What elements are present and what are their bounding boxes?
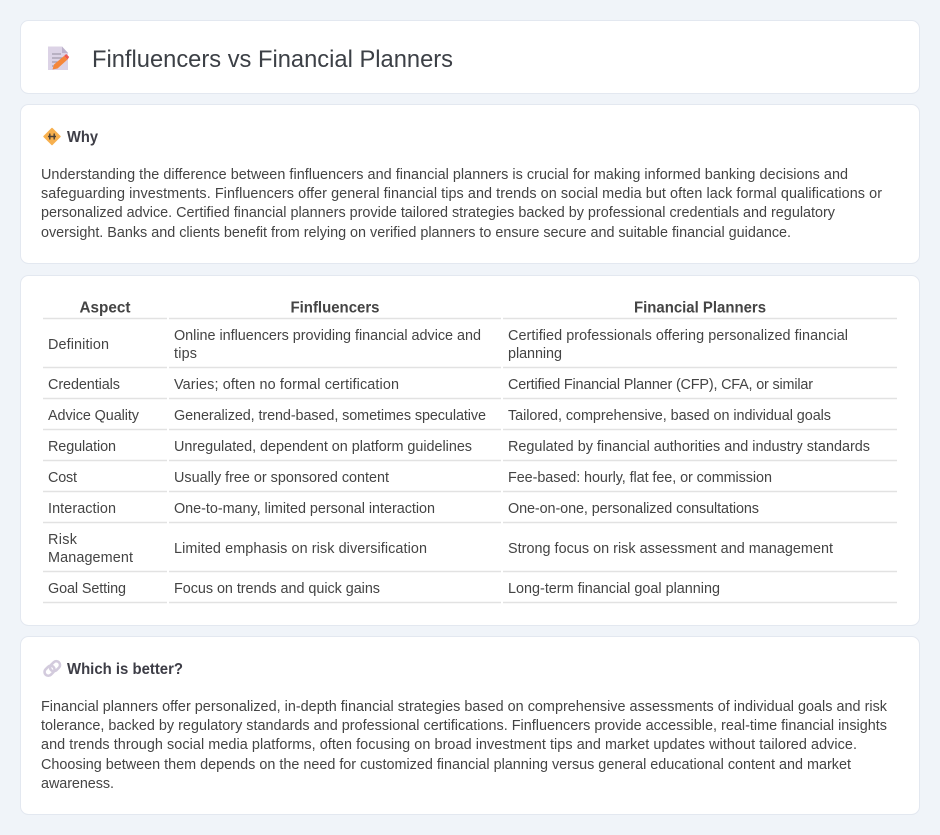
row: cost: Cost	[48, 470, 77, 486]
text block: why: personalized advice. Certified financial planners provide tailored strategies backed by professional credentials and regulatory	[41, 205, 836, 221]
row: advice quality: Tailored, comprehensive, based on individual goals	[508, 408, 831, 424]
icon: chain link	[43, 660, 62, 677]
row: advice quality	[48, 408, 831, 424]
icon: document with pencil	[48, 46, 69, 70]
text block: why: oversight. Banks and clients benefit from relying on verified planners to ensure secure and suitable financial guidance.	[41, 225, 791, 241]
heading: why: Why	[67, 129, 98, 146]
row: definition: planning	[508, 346, 562, 362]
row: interaction: One-on-one, personalized consultations	[508, 501, 759, 517]
row: risk management: Strong focus on risk assessment and management	[508, 541, 833, 557]
row: definition: Definition	[48, 337, 109, 353]
row: definition: tips	[174, 346, 197, 362]
text block: which is better: awareness.	[41, 776, 114, 792]
row: risk management: Limited emphasis on risk diversification	[174, 541, 427, 557]
text block: which is better: tolerance, backed by regulatory standards and professional certifications. Finfluencers provide accessible, real-time financial insights	[41, 718, 887, 734]
table header: Financial Planners	[634, 300, 766, 316]
row: definition: Certified professionals offering personalized financial	[508, 328, 848, 344]
text block: why	[41, 167, 882, 241]
panel: comparison table	[20, 276, 920, 626]
text block: why: safeguarding investments. Finfluencers offer general financial tips and trends on social media but often lack formal qualifications or	[41, 186, 882, 202]
row: regulation	[48, 439, 870, 455]
row: credentials: Varies; often no formal certification	[174, 377, 399, 393]
row: interaction: Interaction	[48, 501, 116, 517]
row: definition	[48, 328, 848, 362]
row: goal setting: Long-term financial goal planning	[508, 581, 720, 597]
row: risk management: Management	[48, 550, 133, 566]
row: cost: Usually free or sponsored content	[174, 470, 389, 486]
panel: which is better	[20, 636, 920, 814]
text block: which is better: and trends through social media platforms, often focusing on broad investment tips and market updates without tailored advice.	[41, 737, 857, 753]
row: regulation: Regulated by financial authorities and industry standards	[508, 439, 870, 455]
row: interaction	[48, 501, 759, 517]
table header: Aspect	[80, 300, 130, 316]
row: regulation: Unregulated, dependent on platform guidelines	[174, 439, 472, 455]
icon: diamond warning sign	[44, 128, 60, 144]
heading: title: Finfluencers vs Financial Planners	[92, 46, 453, 73]
heading: which is better: Which is better?	[67, 661, 183, 678]
row: definition: Online influencers providing financial advice and	[174, 328, 481, 344]
row: credentials: Certified Financial Planner (CFP), CFA, or similar	[508, 377, 813, 393]
text block: why: Understanding the difference between finfluencers and financial planners is crucial for making informed banking decisions and	[41, 167, 848, 183]
text block: which is better: Choosing between them depends on the need for customized financial planning versus general educational content and market	[41, 757, 851, 773]
text block: which is better	[41, 699, 888, 792]
row: cost: Fee-based: hourly, flat fee, or commission	[508, 470, 772, 486]
text block: which is better: Financial planners offer personalized, in-depth financial strategies based on comprehensive assessments of individual goals and risk	[41, 699, 888, 715]
row: goal setting: Goal Setting	[48, 581, 126, 597]
panel: why	[20, 104, 920, 264]
row: regulation: Regulation	[48, 439, 116, 455]
panel: title	[20, 20, 920, 94]
row: cost	[48, 470, 772, 486]
row: interaction: One-to-many, limited personal interaction	[174, 501, 435, 517]
row: advice quality: Advice Quality	[48, 408, 140, 424]
row: credentials: Credentials	[48, 377, 120, 393]
row: goal setting: Focus on trends and quick gains	[174, 581, 380, 597]
row: goal setting	[48, 581, 720, 597]
table header	[80, 300, 766, 316]
row: risk management	[48, 532, 833, 566]
row: credentials	[48, 377, 813, 393]
row: risk management: Risk	[48, 532, 78, 548]
table header: Finfluencers	[290, 300, 380, 316]
row: advice quality: Generalized, trend-based, sometimes speculative	[174, 408, 486, 424]
